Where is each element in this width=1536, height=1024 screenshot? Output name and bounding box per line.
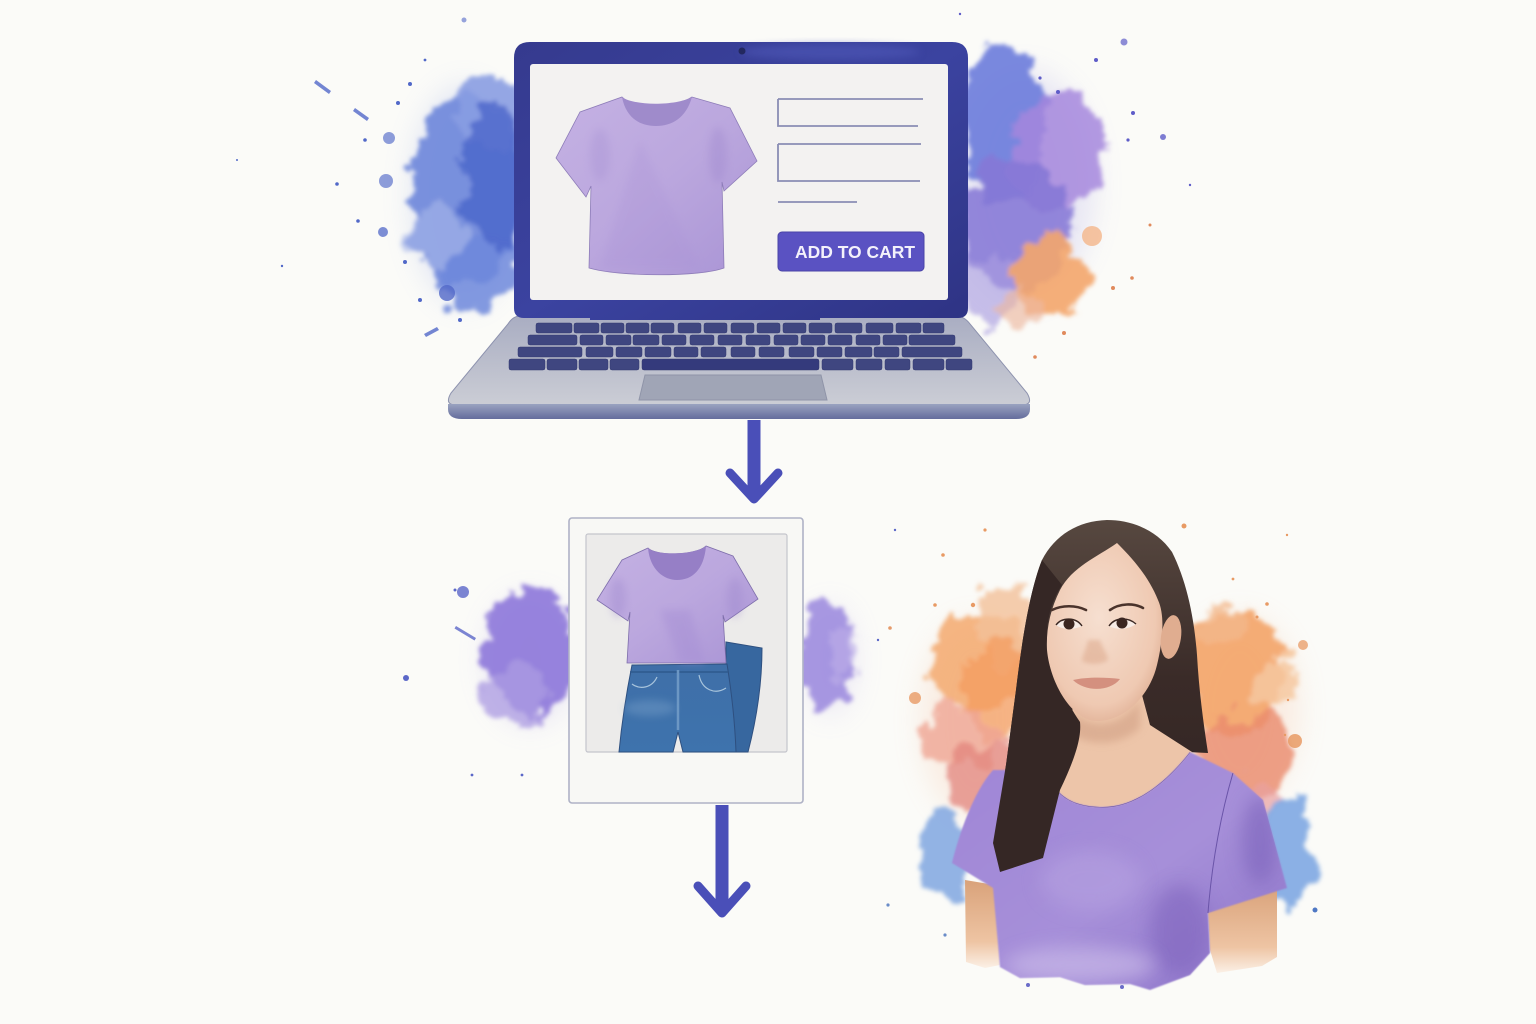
keyboard <box>509 323 972 370</box>
laptop camera <box>738 48 746 54</box>
lid mottling <box>740 44 920 60</box>
laptop front edge <box>448 404 1030 419</box>
arrow: outfit card to customer <box>698 805 746 913</box>
arrow: laptop to outfit card <box>730 420 778 499</box>
paint specks around customer <box>886 524 1318 989</box>
customer portrait <box>952 520 1287 990</box>
arm right <box>1208 886 1277 973</box>
paint specks right <box>959 13 1191 359</box>
cropped t-shirt <box>597 546 758 663</box>
card photo area <box>586 534 787 752</box>
laptop base deck <box>448 316 1030 405</box>
trackpad <box>639 375 827 400</box>
purple t-shirt <box>952 752 1287 990</box>
watercolor splash: customer <box>886 524 1318 989</box>
neck shadow <box>1072 700 1140 743</box>
t-shirt product image <box>556 97 757 275</box>
eyes <box>1056 618 1136 630</box>
laptop screen <box>530 64 948 300</box>
watercolor splash: laptop left blue <box>236 18 527 337</box>
watercolor splash: outfit card <box>403 529 896 776</box>
nose <box>1082 640 1108 664</box>
paint specks around card <box>403 529 896 776</box>
laptop <box>448 42 1030 419</box>
arm left <box>965 880 1000 968</box>
face <box>1047 543 1162 721</box>
brows <box>1052 604 1143 610</box>
paint specks left <box>236 18 466 337</box>
card frame <box>569 518 803 803</box>
product form lines <box>778 99 923 202</box>
ear <box>1158 614 1184 660</box>
hair behind <box>993 520 1208 872</box>
outfit card <box>569 518 803 803</box>
watercolor splash: laptop right purple and orange <box>955 13 1191 359</box>
laptop lid <box>514 42 968 320</box>
add to cart button: ADD TO CART <box>795 242 915 262</box>
lips <box>1073 678 1120 689</box>
neck <box>1050 680 1192 830</box>
t-shirt shading <box>1005 752 1278 983</box>
jeans <box>619 642 762 752</box>
hair front lock <box>993 560 1080 872</box>
add to cart button <box>778 232 924 271</box>
